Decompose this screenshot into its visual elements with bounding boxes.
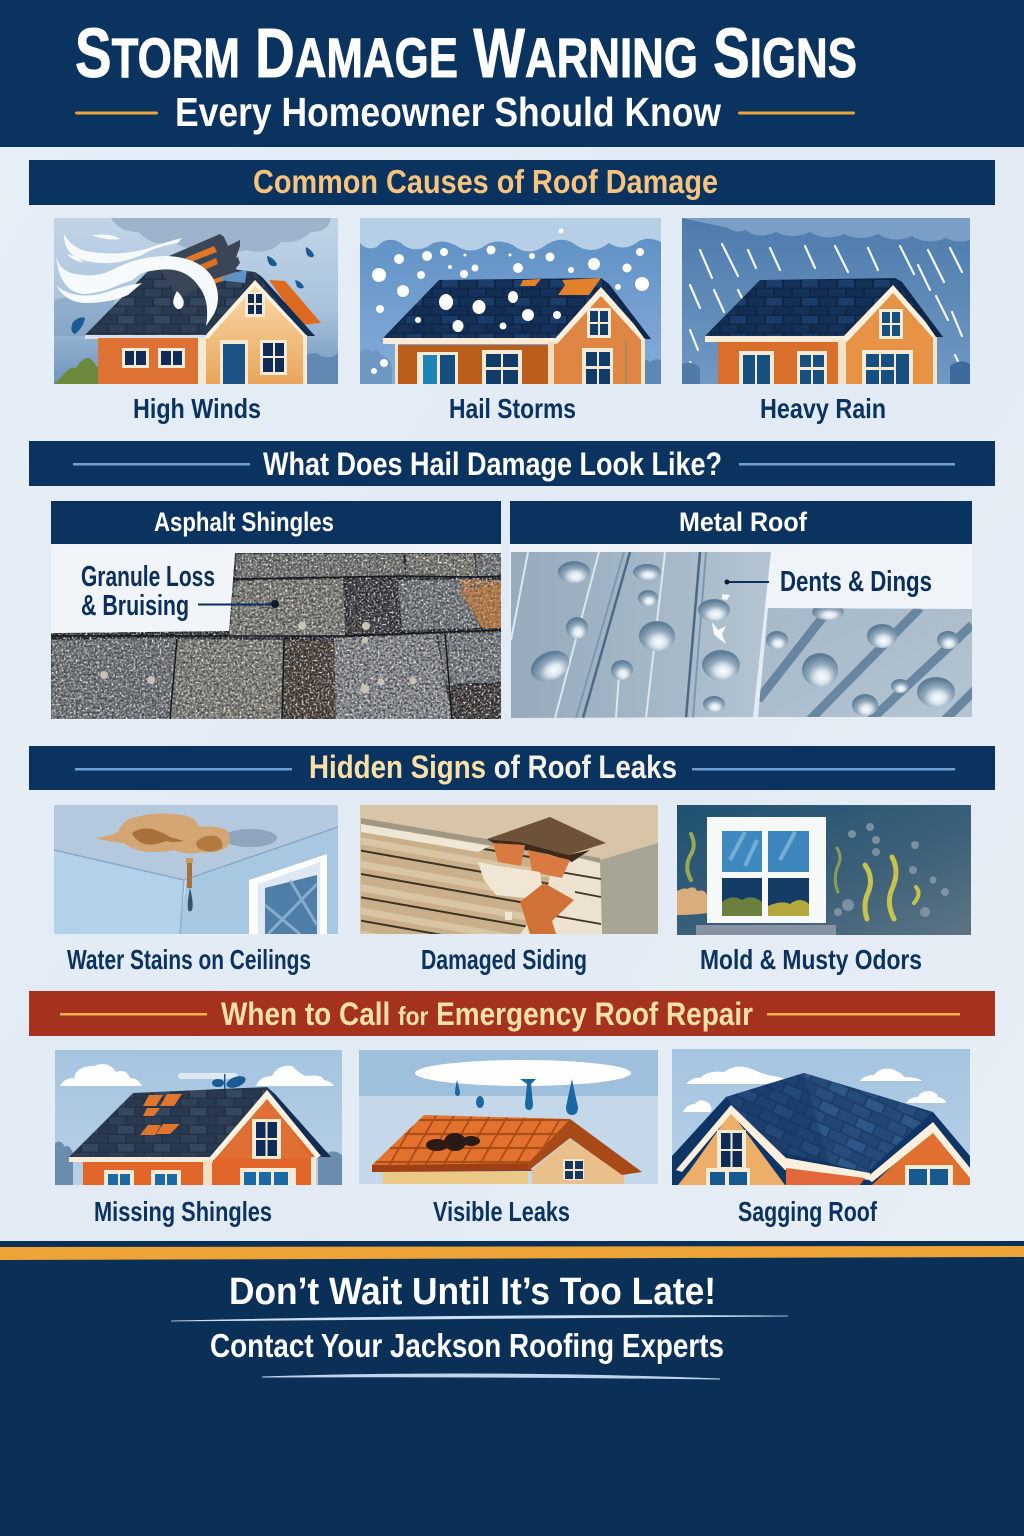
section heading: common causes bbox=[29, 160, 995, 205]
panel: sagging roof bbox=[672, 1049, 970, 1185]
section heading: hidden signs bbox=[29, 746, 995, 790]
header band bbox=[0, 0, 1024, 147]
call to action headline: Don’t Wait Until It’s Too Late! bbox=[229, 1271, 716, 1313]
label: high winds: High Winds bbox=[133, 393, 261, 424]
title: STORM DAMAGE WARNING SIGNS bbox=[75, 14, 857, 92]
headline underline bbox=[171, 1316, 788, 1321]
heading: metal roof bbox=[510, 501, 972, 544]
subtitle: Every Homeowner Should Know bbox=[175, 89, 721, 135]
heading: metal roof: Metal Roof bbox=[679, 507, 808, 537]
photo: metal panel angled bbox=[758, 608, 972, 717]
panel: missing shingles bbox=[55, 1050, 342, 1185]
callout: granule loss: Granule Loss bbox=[81, 561, 215, 593]
label: missing shingles: Missing Shingles bbox=[94, 1196, 272, 1227]
panel: high winds bbox=[54, 218, 338, 384]
panel: asphalt shingles bbox=[51, 501, 501, 719]
heading: asphalt shingles: Asphalt Shingles bbox=[154, 507, 334, 537]
heading: asphalt shingles bbox=[51, 501, 501, 544]
panel: mold bbox=[677, 805, 971, 935]
section heading: hidden signs: Hidden Signs of Roof Leaks bbox=[309, 749, 677, 785]
section heading: hail damage bbox=[29, 441, 995, 486]
label: hail storms: Hail Storms bbox=[449, 393, 576, 424]
callout: granule loss bbox=[51, 545, 279, 633]
section heading: emergency repair: When to Call for Emergency Roof Repair bbox=[221, 996, 753, 1032]
footer bbox=[0, 1241, 1024, 1536]
label: heavy rain: Heavy Rain bbox=[760, 393, 886, 424]
panel: heavy rain bbox=[682, 218, 970, 384]
section heading: emergency repair bbox=[29, 991, 995, 1036]
label: damaged siding: Damaged Siding bbox=[421, 944, 587, 975]
panel: metal roof bbox=[510, 501, 985, 730]
callout: dents and dings: Dents & Dings bbox=[780, 566, 932, 598]
section heading: common causes: Common Causes of Roof Damage bbox=[253, 163, 718, 200]
label: mold and musty odors: Mold & Musty Odors bbox=[700, 944, 922, 975]
contact underline bbox=[262, 1374, 720, 1379]
callout: dents and dings bbox=[724, 566, 932, 598]
panel: hail storms bbox=[360, 218, 661, 384]
panel: water stains bbox=[54, 805, 338, 934]
photo: asphalt shingles bbox=[51, 553, 501, 719]
photo: metal panel front bbox=[511, 552, 771, 718]
label: visible leaks: Visible Leaks bbox=[433, 1196, 570, 1227]
panel: visible leaks bbox=[359, 1050, 658, 1184]
label: sagging roof: Sagging Roof bbox=[738, 1196, 878, 1227]
label: water stains: Water Stains on Ceilings bbox=[67, 944, 311, 975]
callout: granule loss: & Bruising bbox=[81, 590, 189, 622]
contact line: Contact Your Jackson Roofing Experts bbox=[210, 1327, 724, 1364]
panel: damaged siding bbox=[360, 805, 658, 934]
section heading: hail damage: What Does Hail Damage Look Like? bbox=[263, 446, 722, 482]
